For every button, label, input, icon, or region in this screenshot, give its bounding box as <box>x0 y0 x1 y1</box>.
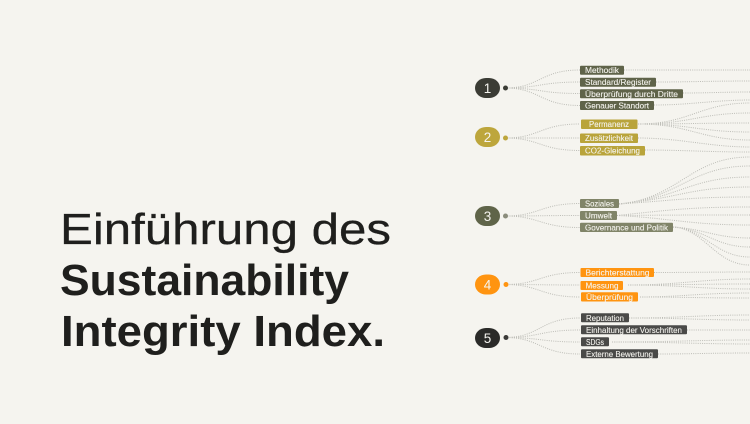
node 4: 4 <box>484 278 492 292</box>
dot 5 <box>504 335 508 340</box>
dot 4 <box>504 282 508 287</box>
node 2 <box>475 127 500 147</box>
title: Einführung des <box>60 205 391 254</box>
node 3: 3 <box>484 209 491 224</box>
label: Governance und Politik: Governance und Politik <box>585 223 669 232</box>
label: Genauer Standort: Genauer Standort <box>585 102 650 110</box>
group 1 <box>475 66 683 110</box>
group 3 <box>475 199 673 232</box>
group 2 <box>475 120 645 156</box>
connector lines: outgoing to right edge <box>612 70 750 354</box>
node 1 <box>475 78 500 98</box>
label: Umwelt: Umwelt <box>585 212 613 220</box>
title <box>60 205 391 356</box>
group 4 <box>475 268 654 302</box>
node 4 <box>475 274 500 294</box>
group 5 <box>475 313 687 359</box>
dot 1 <box>503 86 508 90</box>
label: Zusätzlichkeit: Zusätzlichkeit <box>585 134 634 143</box>
label: Externe Bewertung: Externe Bewertung <box>586 350 653 359</box>
connector lines: dots to labels <box>505 70 580 354</box>
label: Überprüfung durch Dritte: Überprüfung durch Dritte <box>585 90 679 99</box>
label: Berichterstattung: Berichterstattung <box>586 268 650 278</box>
label: Soziales: Soziales <box>585 200 614 208</box>
dot 3 <box>503 214 508 218</box>
label: Reputation: Reputation <box>586 314 624 323</box>
label: Umwelt <box>580 211 617 220</box>
node 2: 2 <box>484 130 491 145</box>
label: Einhaltung der Vorschriften: Einhaltung der Vorschriften <box>586 326 682 335</box>
label: SDGs: SDGs <box>586 338 604 347</box>
node 1: 1 <box>484 81 491 96</box>
title: Sustainability <box>60 256 350 305</box>
label: Methodik: Methodik <box>585 66 620 75</box>
label: Permanenz: Permanenz <box>589 120 629 129</box>
label: Permanenz <box>581 120 638 129</box>
dot 2 <box>503 136 508 140</box>
node 5 <box>475 328 500 348</box>
label: CO2-Gleichung: CO2-Gleichung <box>585 147 640 156</box>
label: Messung: Messung <box>586 282 618 290</box>
node 3 <box>475 206 500 226</box>
node 5: 5 <box>484 331 491 346</box>
label: Überprüfung: Überprüfung <box>586 293 633 302</box>
title: Integrity Index. <box>61 307 385 356</box>
label: Standard/Register: Standard/Register <box>585 78 651 87</box>
